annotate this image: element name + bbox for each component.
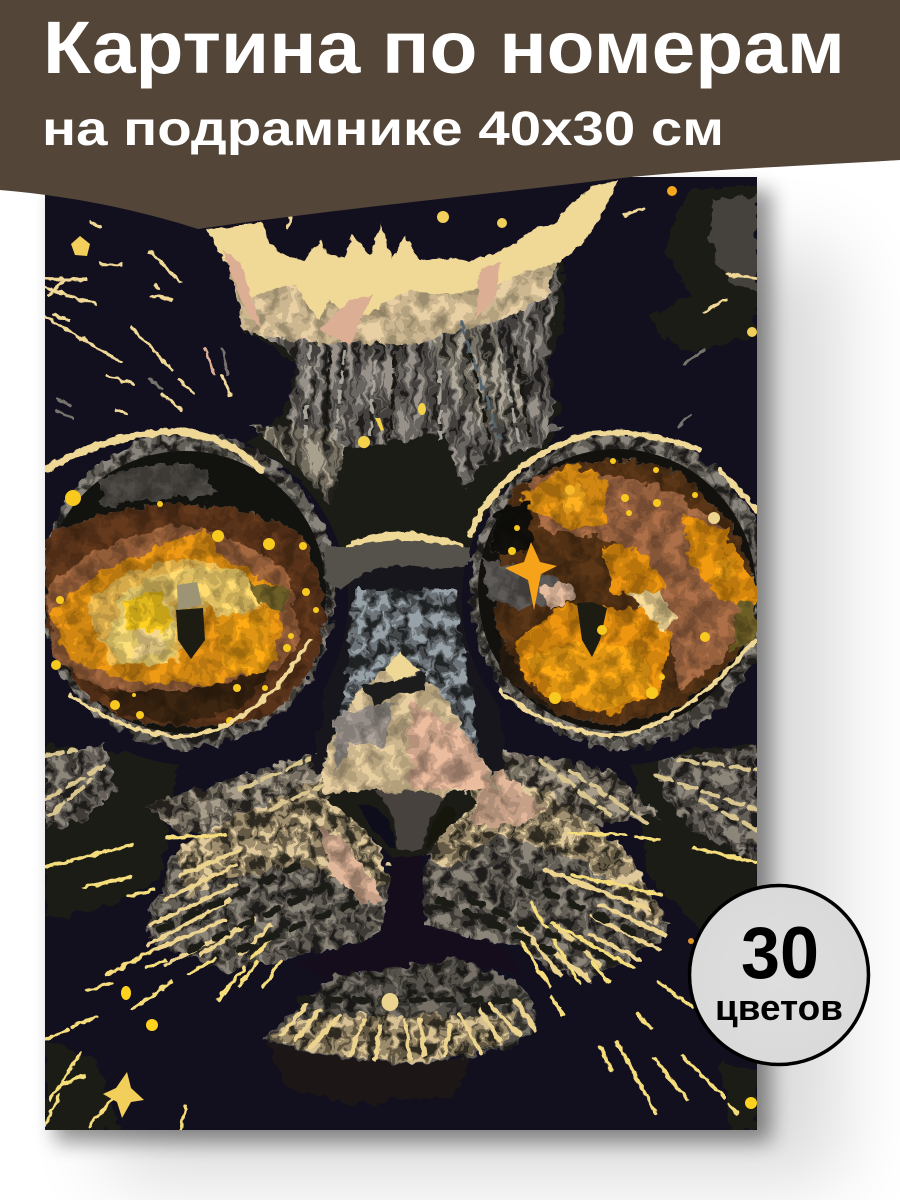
subtitle: на подрамнике 40х30 см: [42, 103, 724, 156]
badge number: 30: [741, 913, 819, 994]
right glasses lens: [462, 432, 782, 765]
lower face dark patches: [45, 745, 757, 1130]
badge label: цветов: [715, 987, 843, 1028]
bridge dark: [310, 684, 505, 774]
glasses bridge: [325, 533, 470, 590]
right muzzle fur: [422, 770, 668, 980]
upper cheek fur: [45, 745, 757, 860]
painting background: [45, 177, 757, 1130]
muzzle grey patch: [335, 700, 395, 770]
left rim: [40, 432, 336, 748]
whiskers and fur strokes: [45, 745, 757, 1128]
bright yellow whiskers: [45, 833, 757, 1128]
left pupil highlight: [177, 582, 202, 610]
fur between lenses, left: [250, 425, 345, 505]
muzzle cream spikes: [148, 850, 665, 1060]
right rim: [470, 432, 770, 748]
left lens colours: [45, 464, 326, 726]
right lens colours: [482, 461, 756, 725]
cream ear tops: [206, 180, 618, 345]
badge: 30 colours: [690, 886, 868, 1064]
left lens gold specks: [51, 490, 319, 725]
muzzle tan: [320, 660, 500, 795]
canvas drop shadow: [55, 190, 840, 1180]
dark fur gaps: [160, 860, 640, 1000]
upper cheek strokes: [45, 745, 757, 830]
muzzle peach: [410, 700, 495, 790]
fur between lenses, right: [444, 424, 564, 490]
gold dots and stars: [71, 186, 757, 1118]
forehead gold specks: [358, 403, 426, 448]
left rim highlight: [45, 431, 310, 736]
right lens gold specks: [508, 458, 720, 704]
dark forehead centre: [336, 445, 466, 504]
right lens dark: [478, 449, 756, 731]
chin fur: [263, 958, 540, 1063]
ears and forehead: [206, 180, 618, 550]
left glasses lens: [32, 431, 348, 765]
nose: [327, 788, 477, 858]
mouth and philtrum: [336, 869, 494, 951]
right rim highlight: [470, 433, 757, 736]
title: Картина по номерам: [43, 6, 845, 89]
left lens shadow: [126, 453, 340, 764]
paint splatters on background: [45, 209, 757, 428]
right pupil: [577, 602, 607, 657]
header banner: [0, 0, 900, 229]
left lens dark: [44, 451, 326, 733]
muzzle light tip: [385, 652, 420, 682]
bridge blue-grey: [330, 590, 480, 770]
dark smudge top right: [650, 185, 757, 352]
right lens shadow: [462, 435, 782, 765]
right lens star: [505, 542, 557, 610]
head base: [245, 250, 568, 550]
left pupil: [176, 608, 205, 659]
painting: cat in glasses: [32, 177, 782, 1130]
muzzle dark mark: [360, 672, 425, 705]
chin dot: [382, 993, 398, 1011]
left muzzle fur: [145, 770, 395, 973]
forehead fine strokes: [305, 320, 530, 445]
forehead fur: [250, 270, 560, 455]
tan fur below cream: [229, 262, 558, 347]
nose bridge and muzzle: [310, 560, 505, 795]
forehead light streak: [429, 323, 530, 450]
